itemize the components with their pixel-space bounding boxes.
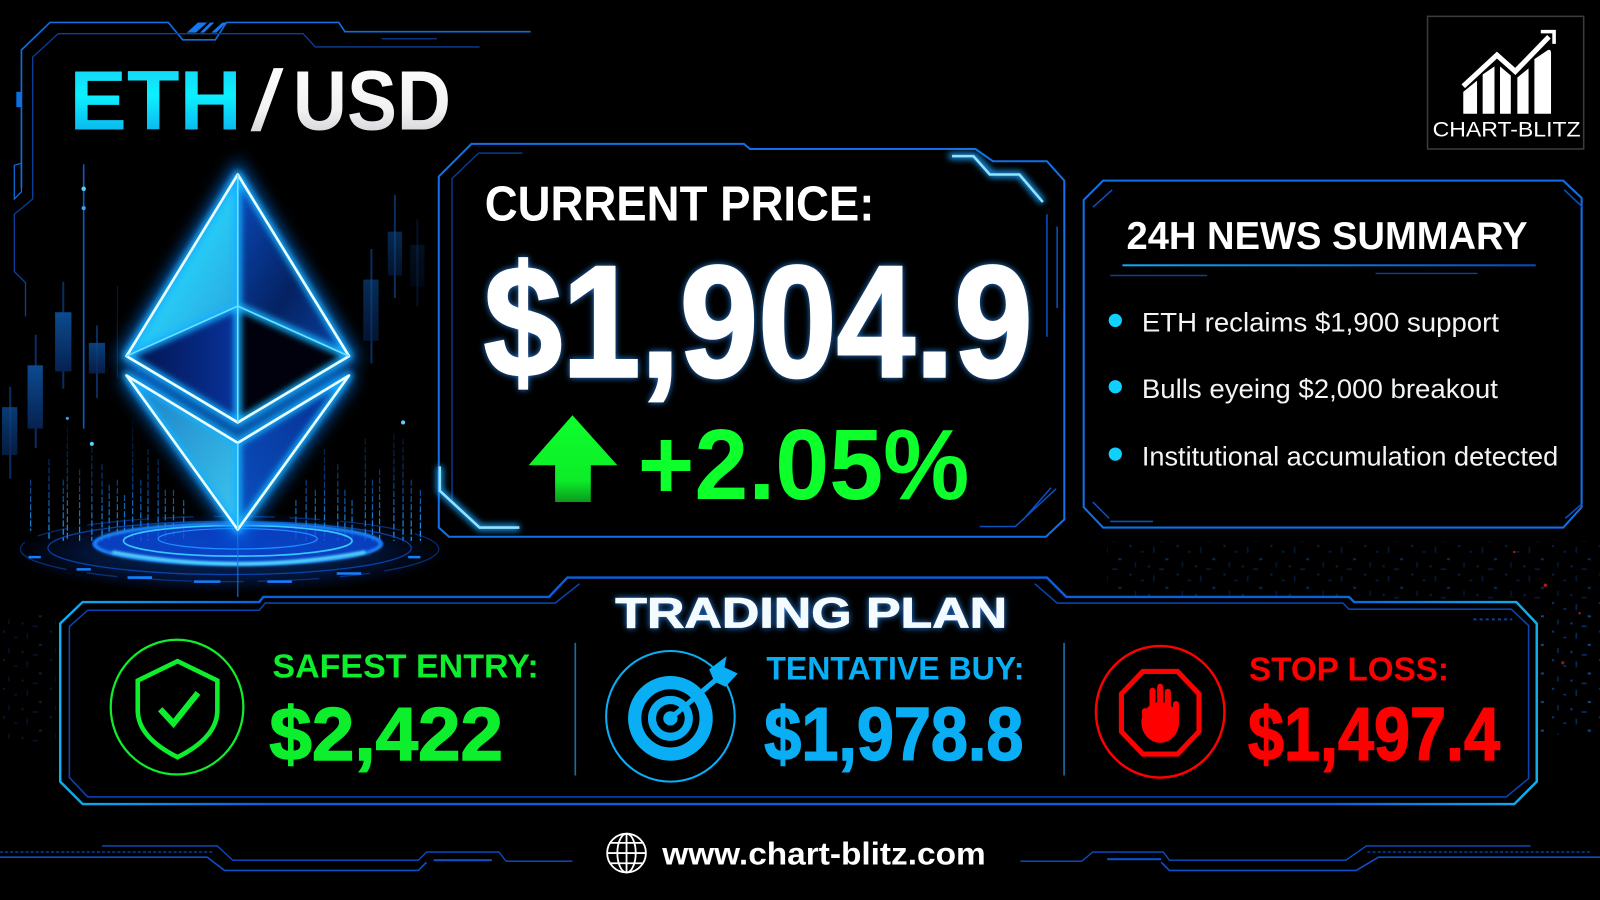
panel: trading plan (60, 578, 1537, 804)
background: candlesticks (2, 164, 424, 479)
icon: target (606, 651, 738, 782)
title: ETH/USD: USD (293, 53, 451, 148)
icon: Ethereum diamond (127, 174, 349, 530)
heading: trading plan: TRADING PLAN (615, 590, 1007, 638)
background: data dots right (0, 541, 1600, 745)
logo wordmark: CHART-BLITZ (1433, 118, 1581, 142)
icon: shield (111, 640, 243, 774)
heading rule (1122, 264, 1536, 266)
icon: globe (607, 834, 646, 872)
entry: tentative buy (764, 650, 1024, 777)
frame: top-left HUD corner (14, 22, 531, 316)
label: current price: CURRENT PRICE: (485, 177, 874, 231)
entry: stop loss: $1,497.4 (1248, 693, 1500, 777)
divider right (1063, 643, 1065, 776)
price value: $1,904.9 (484, 233, 1033, 411)
entry: safest: SAFEST ENTRY: (272, 649, 539, 686)
panel frame (60, 578, 1537, 804)
entry: tentative buy: $1,978.8 (764, 693, 1023, 777)
percent change: +2.05% (638, 409, 969, 521)
entry: stop loss (1248, 652, 1500, 777)
title: ETH/USD: ETH (69, 53, 242, 148)
entry: safest (269, 649, 539, 777)
icon: holographic platform (10, 512, 449, 597)
website url: www.chart-blitz.com (661, 835, 986, 871)
entry: tentative buy: TENTATIVE BUY: (766, 650, 1024, 687)
panel: current price (439, 144, 1064, 537)
panel frame (439, 144, 1064, 537)
background: digital rain (31, 417, 420, 541)
news item 3: Institutional accumulation detected (1142, 441, 1558, 471)
title: ETH/USD (69, 53, 451, 148)
footer: HUD lines (0, 846, 1600, 870)
title: ETH/USD: / (247, 54, 287, 148)
logo: chart-blitz (1428, 16, 1584, 149)
entry: stop loss: STOP LOSS: (1249, 652, 1449, 689)
icon glow (127, 174, 349, 530)
panel frame (1084, 181, 1583, 528)
icon: stop hand (1096, 646, 1224, 778)
icon: up arrow (529, 415, 617, 502)
entry: safest: $2,422 (269, 693, 503, 777)
heading: 24H NEWS SUMMARY (1127, 215, 1528, 258)
panel: 24h news summary (1084, 181, 1583, 528)
news item 1: ETH reclaims $1,900 support (1142, 308, 1499, 338)
divider left (574, 643, 576, 776)
icon: bar chart with arrow (1463, 32, 1554, 114)
news item 2: Bulls eyeing $2,000 breakout (1142, 374, 1498, 404)
